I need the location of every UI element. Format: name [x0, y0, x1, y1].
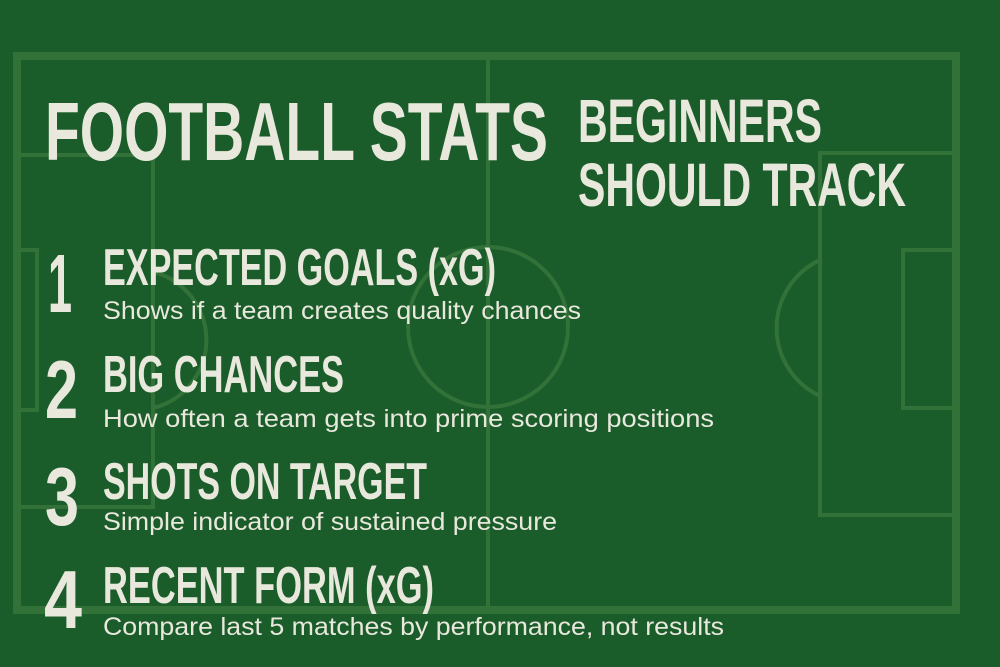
item 3: Simple indicator of sustained pressure [103, 508, 557, 536]
item 4: Compare last 5 matches by performance, not results [103, 613, 724, 641]
item 2 [45, 343, 714, 436]
item 2: How often a team gets into prime scoring positions [103, 405, 714, 433]
item 4: RECENT FORM (xG) [103, 557, 434, 615]
item 2: BIG CHANCES [103, 346, 344, 404]
title: FOOTBALL STATS [45, 85, 548, 178]
item 1: 1 [48, 237, 72, 330]
pitch markings [17, 56, 956, 610]
item 1 [48, 237, 581, 330]
item 4: 4 [44, 553, 82, 646]
title: BEGINNERS [578, 87, 822, 155]
item 1: Shows if a team creates quality chances [103, 297, 581, 325]
item 2: 2 [45, 343, 78, 436]
item 1: EXPECTED GOALS (xG) [103, 239, 496, 297]
item 3 [45, 450, 557, 543]
title [45, 85, 906, 219]
item 3: SHOTS ON TARGET [103, 453, 427, 511]
item 3: 3 [45, 450, 79, 543]
item 4 [44, 553, 724, 646]
